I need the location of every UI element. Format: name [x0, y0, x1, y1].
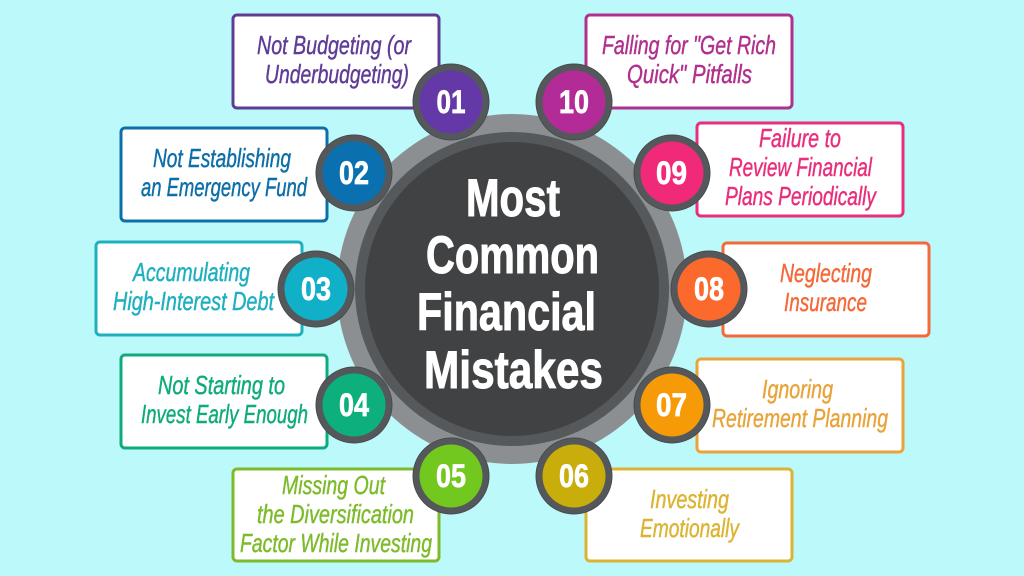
- panel: 05 diversification: Factor While Investing: [240, 528, 432, 558]
- panel: 10 get rich quick: [586, 15, 792, 108]
- panel: 08 neglecting insurance: Neglecting: [780, 258, 872, 288]
- panel: 07 retirement planning: Retirement Planning: [712, 403, 888, 433]
- badge 07: [634, 367, 710, 443]
- badge 08: 08: [694, 271, 724, 307]
- panel: 06 investing emotionally: [586, 469, 792, 561]
- panel: 01 not budgeting: Underbudgeting): [265, 59, 409, 89]
- panel: 09 review financial plans: [697, 123, 903, 216]
- panel: 03 high-interest debt: High-Interest Debt: [113, 286, 275, 316]
- badge 01: [413, 64, 489, 140]
- badge 10: [536, 64, 612, 140]
- badge 04: [316, 367, 392, 443]
- badge 07: 07: [656, 387, 687, 423]
- panel: 09 review financial plans: Review Financial: [729, 152, 873, 182]
- badge 04: 04: [339, 387, 369, 423]
- panel: 08 neglecting insurance: Insurance: [784, 287, 867, 317]
- title: Financial: [417, 283, 596, 342]
- panel: 03 high-interest debt: [96, 242, 302, 335]
- badge 06: 06: [559, 458, 589, 494]
- central hub: [337, 114, 687, 464]
- title: Most: [466, 169, 560, 228]
- panel: 06 investing emotionally: Investing: [650, 484, 729, 514]
- panel: 09 review financial plans: Failure to: [759, 123, 841, 153]
- panel: 07 retirement planning: [697, 359, 903, 452]
- panel: 02 emergency fund: [121, 128, 327, 221]
- panel: 05 diversification: the Diversification: [257, 499, 414, 529]
- badge 09: 09: [656, 155, 687, 191]
- panel: 04 invest early: Invest Early Enough: [141, 399, 308, 429]
- badge 06: [536, 438, 612, 514]
- badge 02: [316, 135, 392, 211]
- badge 10: 10: [559, 84, 589, 120]
- panel: 04 invest early: Not Starting to: [158, 370, 285, 400]
- badge 01: 01: [436, 84, 466, 120]
- panel: 04 invest early: [121, 355, 327, 448]
- panel: 02 emergency fund: Not Establishing: [153, 143, 291, 173]
- badge 03: 03: [301, 271, 331, 307]
- badge 05: 05: [436, 458, 466, 494]
- panel: 10 get rich quick: Quick" Pitfalls: [627, 59, 752, 89]
- title: [417, 169, 603, 400]
- panel: 05 diversification: Missing Out: [282, 470, 386, 500]
- panel: 07 retirement planning: Ignoring: [762, 374, 833, 404]
- panel: 06 investing emotionally: Emotionally: [640, 513, 740, 543]
- panel: 09 review financial plans: Plans Periodically: [725, 181, 877, 211]
- panel: 02 emergency fund: an Emergency Fund: [141, 172, 308, 202]
- badge 09: [634, 135, 710, 211]
- badge 05: [413, 438, 489, 514]
- title: Common: [426, 226, 599, 285]
- badge 08: [671, 251, 747, 327]
- panel: 01 not budgeting: Not Budgeting (or: [257, 30, 412, 60]
- panel: 03 high-interest debt: Accumulating: [132, 257, 250, 287]
- panel: 05 diversification: [233, 469, 439, 561]
- panel: 08 neglecting insurance: [723, 243, 929, 336]
- panel: 01 not budgeting: [233, 15, 439, 108]
- panel: 10 get rich quick: Falling for "Get Rich: [602, 30, 776, 60]
- title: Mistakes: [424, 341, 603, 400]
- badge 02: 02: [339, 155, 369, 191]
- badge 03: [278, 251, 354, 327]
